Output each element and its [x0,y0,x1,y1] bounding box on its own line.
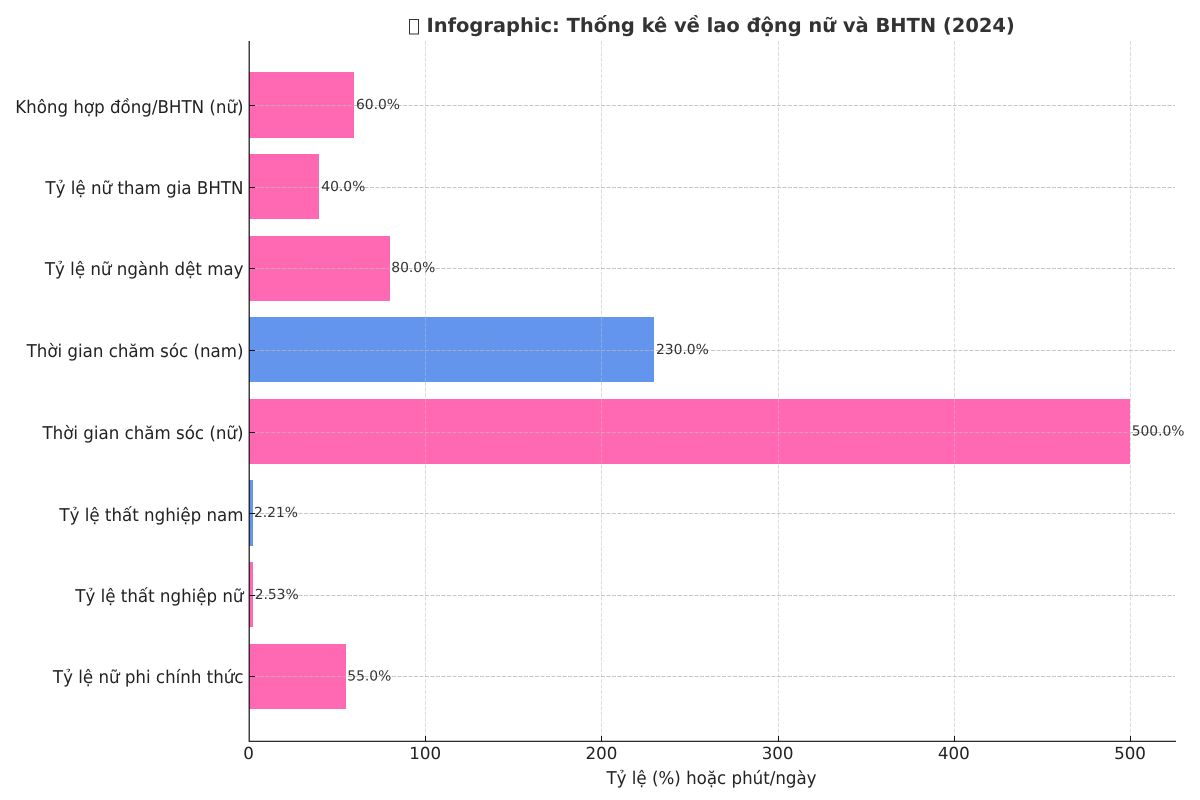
value labels: 2.53% [255,587,299,603]
bar: Thời gian chăm sóc (nữ) [249,399,1130,464]
bar: Thời gian chăm sóc (nam) [249,317,654,382]
bar: Tỷ lệ nữ tham gia BHTN [249,154,319,219]
y-axis labels: Tỷ lệ nữ phi chính thức [52,668,244,688]
y-axis labels [15,98,244,688]
value labels: 80.0% [391,260,435,276]
y-axis labels: Tỷ lệ nữ tham gia BHTN [44,179,244,199]
value labels: 2.21% [254,505,298,521]
x-axis tick labels: 0 [243,744,254,763]
x-axis tick labels [243,744,1146,763]
value labels: 55.0% [347,668,391,684]
value labels: 60.0% [356,97,400,113]
bars [249,72,1130,709]
x-axis tick labels: 500 [1114,744,1146,763]
value labels [254,97,1184,684]
bar: Tỷ lệ thất nghiệp nam [249,480,253,546]
x-axis tick labels: 400 [938,744,970,763]
y-axis labels: Tỷ lệ thất nghiệp nữ [74,587,244,607]
x-axis tick labels: 300 [762,744,793,763]
y-axis labels: Thời gian chăm sóc (nam) [26,342,244,362]
bar: Tỷ lệ nữ ngành dệt may [249,236,390,301]
value labels: 230.0% [656,342,709,358]
title: Infographic: Thống kê về lao động nữ và BHTN (2024) [426,14,1015,37]
x-axis tick labels: 200 [586,744,617,763]
x-axis title: Tỷ lệ (%) hoặc phút/ngày [605,769,817,789]
y-axis labels: Không hợp đồng/BHTN (nữ) [15,98,244,118]
y-axis labels: Tỷ lệ thất nghiệp nam [58,506,244,526]
x-axis tick labels: 100 [409,744,441,763]
y-axis labels: Tỷ lệ nữ ngành dệt may [44,260,244,280]
bar: Tỷ lệ nữ phi chính thức [249,644,346,709]
value labels: 40.0% [321,179,365,195]
value labels: 500.0% [1132,424,1184,440]
axes [249,41,1176,742]
bar: Tỷ lệ thất nghiệp nữ [249,562,253,627]
y-axis labels: Thời gian chăm sóc (nữ) [42,424,244,444]
bar: Không hợp đồng/BHTN (nữ) [249,72,354,138]
